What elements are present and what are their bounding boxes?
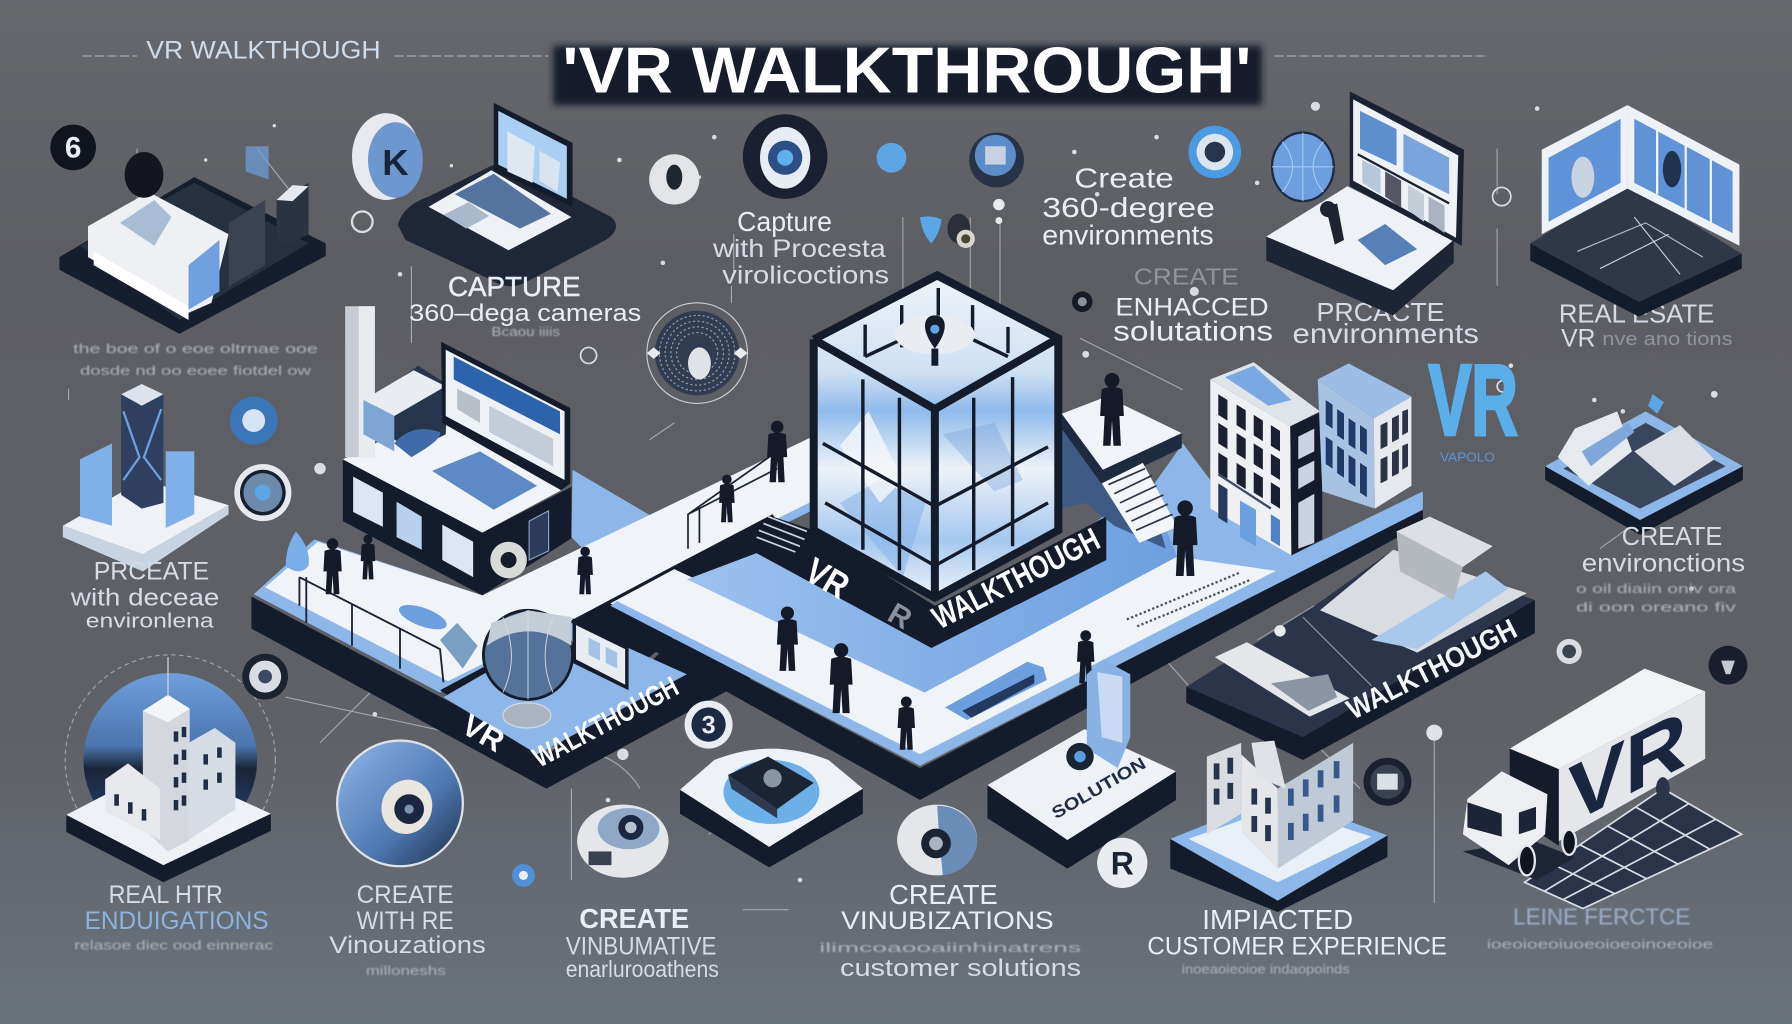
heading: capture with process <box>712 206 889 289</box>
heading: enhanced solutions: solutations <box>1113 316 1273 347</box>
icon: small dark ring <box>1072 291 1093 312</box>
platform label: WALKTHROUGH right: WALKTHOUGH <box>1342 613 1522 726</box>
heading: capture with process: with Procesta <box>712 235 886 263</box>
heading: procreate left <box>70 557 219 632</box>
heading: create environments right: environctions <box>1582 549 1745 577</box>
blue ramp card <box>945 662 1047 720</box>
heading: capture 360: Bcaou iiiis <box>491 325 560 339</box>
heading: create with <box>329 881 486 978</box>
heading: capture 360 <box>409 271 641 339</box>
icon: blue dot <box>877 143 906 173</box>
heading: real estate: nve ano tions <box>1602 328 1733 349</box>
icon: camera sphere <box>336 739 464 867</box>
light blue pad behind building <box>571 470 650 549</box>
heading: procreate left: PRCEATE <box>94 557 209 585</box>
panel: top-left building cluster <box>59 146 326 334</box>
icon: ring badge lower <box>242 654 288 699</box>
panel: lower-left platform and walkway <box>251 437 818 789</box>
icon: white eye sphere <box>897 805 977 875</box>
badge: 6: 6 <box>65 132 81 165</box>
heading: create innovative: VINBUMATIVE <box>566 932 717 960</box>
icon: blue badge <box>230 397 278 445</box>
stripes <box>757 517 807 552</box>
heading: create visualizations: VINUBIZATIONS <box>841 907 1054 935</box>
heading: create innovative <box>566 903 719 982</box>
heading: procreate left: environlena <box>86 609 214 632</box>
small text: left caption: dosde nd oo eoee fiotdel ow <box>80 364 312 378</box>
icon: glass globe <box>483 610 573 699</box>
heading: real estate: REAL ESATE <box>1559 298 1714 328</box>
heading: create 360-degree: 360-degree <box>1042 192 1215 223</box>
connector lines and specks <box>69 56 1663 910</box>
panel: VR truck and grid <box>1463 669 1742 909</box>
heading: create innovative: enarlurooathens <box>566 956 719 982</box>
panel: building with screen <box>343 306 571 595</box>
panel: glass cube <box>757 275 1106 648</box>
icon: eye camera <box>743 114 827 199</box>
panel: projector plate <box>680 749 863 867</box>
heading: procreate environments <box>1293 297 1479 349</box>
icon: outline pin <box>352 211 373 232</box>
icon: ring badge <box>234 464 291 521</box>
heading: impacted customer experience: CUSTOMER EXPERIENCE <box>1147 932 1447 960</box>
heading: create visualizations <box>819 879 1081 982</box>
panel: platform centre <box>610 423 1423 800</box>
heading: real education: REAL HTR <box>109 881 223 909</box>
icon: blue VR: VR <box>1429 344 1518 456</box>
heading: create visualizations: customer solutions <box>840 955 1081 982</box>
icon: mesh disc <box>647 303 747 403</box>
heading: real education: ENDUIGATIONS <box>85 907 269 935</box>
icon: blue dark circle <box>969 133 1024 187</box>
panel: ramp with stairs <box>1062 397 1182 543</box>
railing upper <box>688 451 777 549</box>
panel: building one <box>1210 362 1322 555</box>
heading: real estate: VR <box>1561 324 1595 352</box>
heading: enhanced solutions <box>1113 264 1273 347</box>
small blue label: VAPOLO <box>1440 451 1495 465</box>
heading: procreate environments: PRCACTE <box>1317 297 1445 327</box>
heading: create with: WITH RE <box>357 907 454 935</box>
badge: 3 <box>685 701 733 749</box>
icon: cube eye <box>895 315 975 366</box>
heading: procreate left: with deceae <box>70 585 219 612</box>
cube base label: R: R <box>882 597 917 636</box>
icon: small puck device <box>577 805 669 878</box>
small ring icons <box>581 187 1511 392</box>
badge: R: R <box>1111 845 1134 881</box>
subtitle: VR WALKTHOUGH <box>146 36 381 64</box>
icon: small ring right <box>1557 639 1582 664</box>
people <box>323 373 1197 750</box>
heading: impacted customer experience: IMPIACTED <box>1202 904 1353 935</box>
icon: globe <box>1272 133 1334 201</box>
icon: dark tile badge <box>1363 758 1411 806</box>
heading: real estate <box>1559 298 1733 352</box>
icon: shield ring <box>1189 126 1241 178</box>
heading: interface: LEINE FERCTCE <box>1513 904 1690 930</box>
heading: real education <box>74 881 273 953</box>
panel: screens on white base <box>1266 91 1464 315</box>
icon: blue dot low <box>512 864 535 887</box>
blue furniture <box>286 531 478 669</box>
heading: create 360-degree: Create <box>1074 162 1174 193</box>
panel: VR truck and grid: VR <box>1568 690 1687 843</box>
heading: create visualizations: ilimcoaooaiinhinatrens <box>819 941 1081 955</box>
icon: blue drop <box>920 216 942 243</box>
heading: create environments right: o oil diaiin oniv ora <box>1576 582 1736 596</box>
railing <box>299 577 443 682</box>
cube base label: WALKTHROUGH: WALKTHOUGH <box>926 521 1106 636</box>
heading: enhanced solutions: ENHACCED <box>1115 293 1269 321</box>
cube base label: VR: VR <box>798 550 856 607</box>
heading: impacted customer experience: inoeaoieoioe indaopoinds <box>1182 963 1350 977</box>
panel: laptop <box>398 103 616 286</box>
heading: procreate environments: environments <box>1293 318 1479 349</box>
heading: capture 360: 360–dega cameras <box>409 300 641 327</box>
icon: tablet <box>573 618 629 690</box>
heading: interface <box>1487 904 1713 952</box>
heading: create environments right <box>1576 521 1745 614</box>
heading: create 360-degree: environments <box>1042 220 1214 251</box>
heading: create with: Vinouzations <box>329 932 486 959</box>
heading: interface: ioeoioeoiuoeoioeoinoeoioe <box>1487 938 1713 952</box>
heading: enhanced solutions: CREATE <box>1134 264 1239 290</box>
panel: real estate corner <box>1530 105 1742 317</box>
icon: dark badge right <box>1709 646 1747 685</box>
platform label: VR: VR <box>456 707 511 759</box>
heading: real education: relasoe diec ood einnerac <box>74 939 273 953</box>
heading: capture 360: CAPTURE <box>448 271 581 302</box>
icon: K tile <box>352 113 423 200</box>
panel: solution plate <box>987 659 1176 869</box>
heading: create visualizations: CREATE <box>889 879 998 910</box>
badge: R <box>1097 838 1147 888</box>
icon: dark pin <box>125 152 163 198</box>
panel: building two <box>1318 363 1411 509</box>
heading: create with: milloneshs <box>366 964 446 978</box>
heading: capture with process: virolicoctions <box>722 261 889 289</box>
badge: 3: 3 <box>702 712 716 740</box>
title banner: 'VR WALKTHROUGH' <box>562 34 1251 107</box>
heading: create environments right: di oon oreano fiv <box>1576 600 1737 614</box>
small text: left caption <box>73 342 318 378</box>
heading: impacted customer experience <box>1147 904 1447 977</box>
panel: right-middle platform <box>1545 394 1743 535</box>
heading: create 360-degree <box>1042 162 1215 251</box>
panel: bottom-left orb <box>65 655 275 882</box>
heading: create environments right: CREATE <box>1622 521 1722 551</box>
badge: 6 <box>50 125 96 170</box>
platform label: WALKTHOUGH: WALKTHOUGH <box>528 671 684 774</box>
heading: create innovative: CREATE <box>579 903 689 934</box>
panel: left tower on base <box>63 384 229 571</box>
icon: line dot <box>1426 725 1442 741</box>
walkway tiny text <box>1127 573 1251 626</box>
small text: left caption: the boe of o eoe oltrnae ooe <box>73 342 318 356</box>
icon: dark camera pin <box>947 214 975 248</box>
icon: white circle <box>649 154 699 205</box>
panel: solution plate: SOLUTION <box>1048 753 1149 823</box>
panel: lower-right dark platform <box>1186 517 1535 760</box>
panel: lower building <box>1170 741 1387 912</box>
heading: capture with process: Capture <box>737 206 832 237</box>
icon: K tile: K <box>382 142 409 183</box>
icon: white pin <box>993 199 1005 224</box>
heading: create with: CREATE <box>357 881 454 909</box>
gray oval pad <box>503 703 551 728</box>
